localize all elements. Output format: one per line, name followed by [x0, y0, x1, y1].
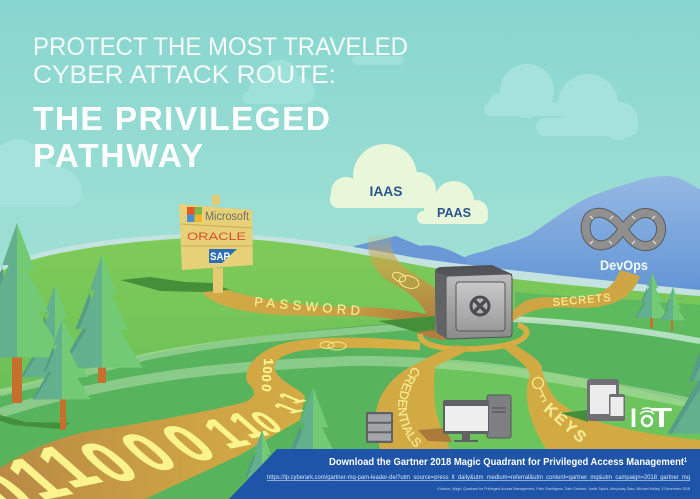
- binary text on route: 0: [259, 374, 274, 382]
- title: [33, 33, 408, 175]
- path: credentials route: [376, 345, 470, 449]
- tree: small front: [236, 430, 287, 499]
- safe shadow: [378, 316, 436, 332]
- cloud: behind title: [242, 60, 315, 104]
- lower right hill: [400, 362, 700, 499]
- cloud: behind title small: [352, 56, 404, 65]
- cloud: left: [0, 139, 82, 207]
- IoT logo: [630, 402, 672, 433]
- tree: right big: [635, 272, 669, 318]
- safe: [435, 265, 512, 339]
- signboard shadow: [120, 277, 230, 292]
- icon: coin route upper: [391, 270, 420, 290]
- safe top and side: [435, 265, 512, 339]
- sky background: [0, 0, 700, 300]
- pale clouds: [0, 56, 638, 207]
- binary text on route: 1: [261, 358, 276, 366]
- binary text on route: 0: [258, 383, 275, 393]
- monitor: [443, 400, 489, 434]
- desktop computer icon: [443, 395, 511, 442]
- sign board: [179, 204, 253, 270]
- path: ring around safe: [420, 325, 527, 349]
- tower: [487, 395, 511, 438]
- cloud: IAAS: [330, 144, 437, 208]
- path: secrets route: [512, 270, 640, 322]
- title line 2: CYBER ATTACK ROUTE:: [33, 61, 336, 89]
- darker hill band: [0, 320, 700, 499]
- binary text on route: 0: [260, 366, 275, 374]
- stand: [454, 434, 478, 442]
- binary text on route: 1: [189, 410, 261, 457]
- banner heading: 1: [684, 458, 688, 464]
- binary text on route: 1: [265, 400, 311, 417]
- trunk: big tree: [12, 355, 22, 403]
- logo: SAP: SAP: [210, 251, 230, 263]
- label: SECRETS: SECRETS: [552, 292, 611, 309]
- signpost: [179, 195, 253, 293]
- tree shadow: [0, 415, 70, 429]
- tree: far right: [667, 280, 700, 434]
- label: CREDENTIALS: CREDENTIALS: [398, 368, 421, 447]
- banner footnote: ¹Gartner, Magic Quadrant for Privileged Access Management, Felix Gaehtgens, Dale Gardner, Justin Taylor, Abhyuday Data, Michael Kelley, 3 December 2018: [437, 487, 690, 491]
- binary text on route: 0: [102, 422, 194, 482]
- icon: coin route left: [320, 342, 346, 350]
- label: PASSWORD: PASSWORD: [254, 294, 361, 318]
- shadow: [560, 410, 588, 422]
- tree: big left: [0, 223, 65, 357]
- label: IAAS: IAAS: [370, 184, 402, 199]
- banner url: https://lp.cyberark.com/gartner-mq-pam-leader-de/?utm_source=press_lt_daily&utm_medium=referral&utm_content=gartner_mq&utm_campaign=2018_gartner_mq: [267, 475, 690, 481]
- logo: ORACLE: ORACLE: [187, 231, 246, 243]
- icon: key: [532, 378, 546, 402]
- cloud: PAAS: [417, 181, 488, 224]
- green hills: [0, 234, 700, 499]
- binary text on route: 1: [17, 433, 117, 499]
- binary text on route: 1: [270, 390, 313, 407]
- binary text on route: 1: [217, 405, 279, 446]
- right trees: [635, 272, 685, 331]
- title line 3: THE PRIVILEGED: [33, 101, 330, 138]
- pale road strips: [0, 319, 700, 413]
- path: keys route: [500, 343, 700, 449]
- safe front: [446, 274, 512, 339]
- desktop shadow: [418, 428, 452, 442]
- IoT logo: I: [630, 403, 637, 433]
- tree: middle: [60, 255, 142, 368]
- cloud: upper right back: [484, 64, 564, 118]
- tree: right small: [661, 287, 685, 320]
- tablet: [587, 379, 619, 421]
- banner: [229, 449, 700, 499]
- tree: behind banner: [270, 387, 354, 499]
- binary text on route: 0: [62, 432, 157, 494]
- tree: small back left: [20, 285, 88, 377]
- cloud: upper right front: [536, 74, 638, 140]
- logo: Microsoft: Microsoft: [205, 211, 250, 223]
- mountains: [354, 176, 700, 300]
- monitor screen: [445, 406, 488, 431]
- path: password route: [204, 288, 436, 332]
- tablet and phone: [560, 379, 625, 422]
- binary text on route: 0: [240, 405, 292, 439]
- binary text on route: [0, 358, 313, 499]
- safe door: [456, 282, 505, 331]
- infinity icon: [586, 213, 661, 246]
- sign post: [212, 195, 223, 293]
- phone: [609, 394, 625, 421]
- path: cloud route: [368, 235, 440, 322]
- server icon: [366, 412, 393, 443]
- label: PAAS: PAAS: [437, 205, 471, 220]
- tower details: [492, 408, 506, 412]
- title line 1: PROTECT THE MOST TRAVELED: [33, 33, 408, 61]
- trunk: front tree: [60, 398, 66, 430]
- path: binary route: [0, 338, 420, 499]
- binary text on route: 0: [145, 415, 233, 473]
- brown patch under safe: [416, 316, 446, 340]
- tree: front: [32, 320, 91, 399]
- trees: [0, 223, 142, 430]
- label: KEYS: KEYS: [540, 400, 589, 447]
- path labels: [251, 270, 611, 476]
- label: DevOps: DevOps: [600, 258, 648, 273]
- safe wheel: [471, 297, 489, 315]
- IoT logo: T: [651, 402, 672, 433]
- title line 4: PATHWAY: [33, 138, 203, 175]
- trunk: middle tree: [98, 366, 106, 383]
- trunk pair: [650, 316, 673, 331]
